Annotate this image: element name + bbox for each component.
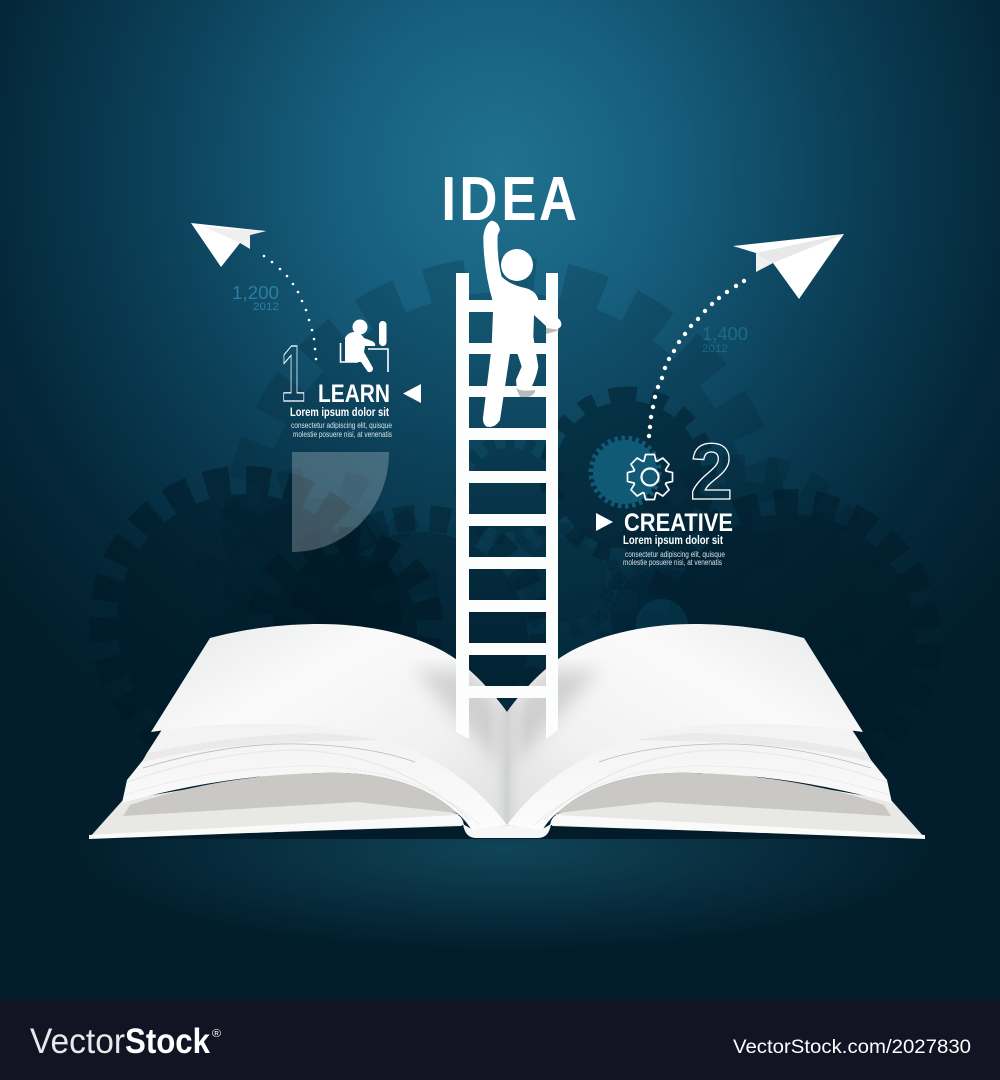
translucent quarter panel <box>292 452 389 552</box>
open book <box>89 624 925 839</box>
left paper plane <box>191 223 266 267</box>
learn subheading: Lorem ipsum dolor sit <box>290 407 389 419</box>
creative body text: molestie posuere nisi, at venenatis <box>623 558 722 567</box>
arrow: left <box>403 384 421 403</box>
small gear behind ladder <box>462 442 558 538</box>
bottom glow <box>0 740 1000 1000</box>
learn body text <box>291 421 392 439</box>
footer logo <box>30 1022 221 1061</box>
learn block <box>281 320 421 439</box>
learn body text: consectetur adipiscing elit, quisque <box>291 421 392 430</box>
right dotted arc <box>647 279 746 438</box>
large central gear <box>187 222 823 858</box>
creative subheading: Lorem ipsum dolor sit <box>623 535 723 547</box>
spine <box>463 824 551 838</box>
left dotted arc <box>263 255 317 360</box>
numeral 2: 2 <box>690 427 733 516</box>
footer bar <box>0 999 1000 1080</box>
icon: outline gear <box>628 454 672 500</box>
climbing figure <box>483 221 561 427</box>
right gear <box>630 480 950 800</box>
heading: learn: LEARN <box>318 380 390 408</box>
left gear <box>69 446 421 798</box>
icon: person at computer <box>340 320 388 372</box>
stat: 1,400: 2012 <box>702 343 728 355</box>
right half <box>507 624 925 839</box>
numeral 1: 1 <box>281 329 305 418</box>
lower right gear <box>602 560 722 680</box>
arrow: right <box>596 513 613 531</box>
dark gear <box>229 509 461 741</box>
gutter notch <box>497 698 517 711</box>
dark gear behind creative icon <box>540 387 716 563</box>
right paper plane <box>733 234 844 299</box>
stat: 1,200: 2012 <box>253 301 279 313</box>
gears backdrop <box>69 222 950 858</box>
right mid gear <box>623 468 867 712</box>
footer logo: Stock <box>125 1022 210 1061</box>
book shadow <box>89 822 925 839</box>
mid lower gear <box>275 495 565 785</box>
footer logo: Vector <box>30 1022 125 1061</box>
creative block <box>596 427 733 567</box>
figure shadows <box>516 388 535 397</box>
mid left gear <box>179 454 451 726</box>
lower small gear behind ladder <box>515 530 615 630</box>
learn body text: molestie posuere nisi, at venenatis <box>293 430 392 439</box>
title: IDEA <box>441 165 577 234</box>
figure body <box>483 221 561 427</box>
figure head <box>501 249 533 281</box>
footer url: VectorStock.com/2027830 <box>733 1037 971 1058</box>
stat: 1,200: 1,200 <box>232 283 279 303</box>
ladder <box>456 273 558 739</box>
left half <box>89 624 507 839</box>
creative body text: consectetur adipiscing elit, quisque <box>625 550 725 559</box>
heading: creative: CREATIVE <box>624 509 733 537</box>
stat: 1,400 <box>702 324 748 355</box>
stat: 1,400: 1,400 <box>702 324 748 344</box>
creative body text <box>623 550 725 567</box>
footer logo: ® <box>212 1028 221 1040</box>
stat: 1,200 <box>232 283 279 313</box>
